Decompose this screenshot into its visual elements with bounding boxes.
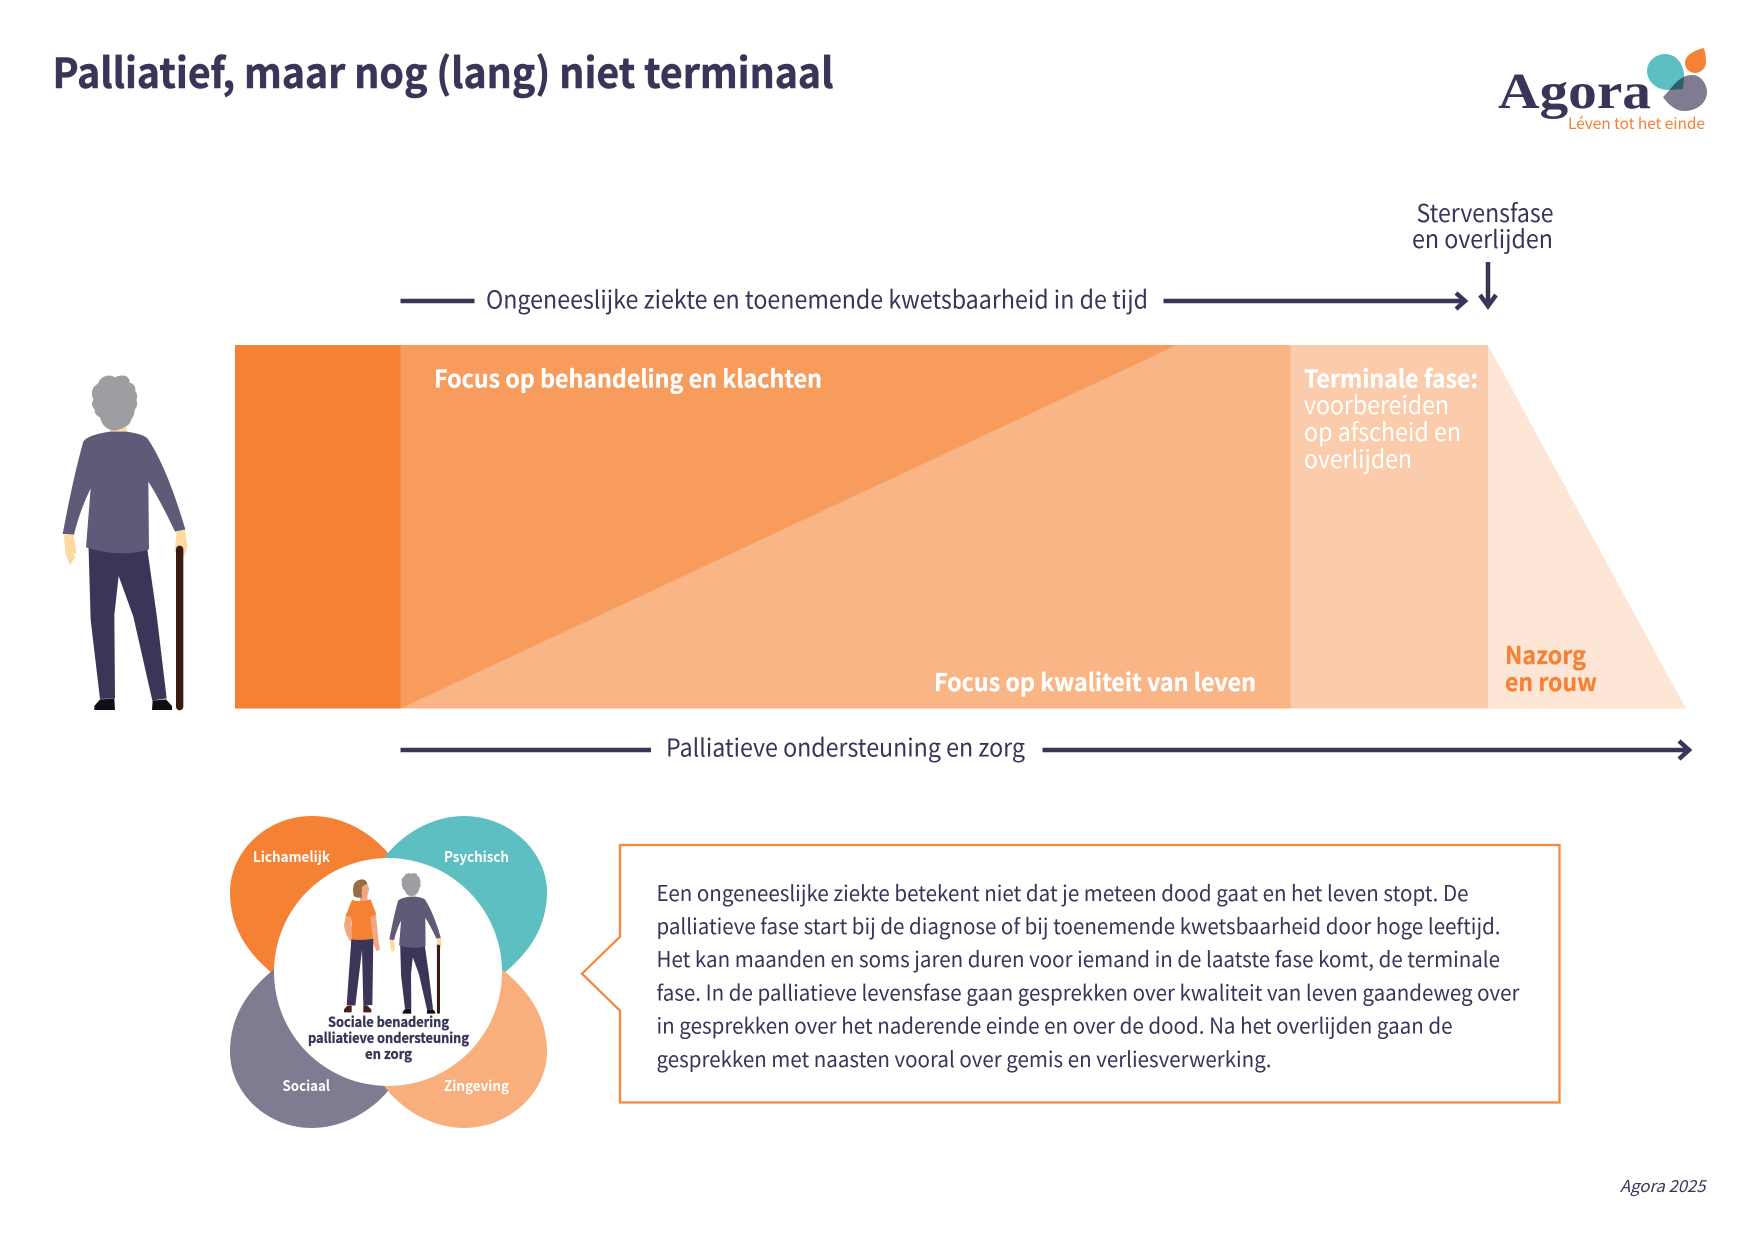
figure: old man with cane <box>63 376 187 710</box>
text: terminal phase: voorbereiden <box>1304 387 1449 422</box>
text: focus on quality: Focus op kwaliteit van leven <box>934 664 1256 699</box>
centre caption <box>308 1012 470 1064</box>
callout: explanation <box>582 845 1560 1102</box>
text: aftercare and grief: en rouw <box>1505 664 1597 699</box>
text: terminal phase: op afscheid en <box>1304 414 1461 449</box>
label: Stervensfase en overlijden: en overlijden <box>1412 221 1553 256</box>
petal: meaning <box>384 970 547 1128</box>
text: terminal phase: overlijden <box>1304 441 1412 476</box>
logo shape: teal drop <box>1647 54 1684 90</box>
callout text: in gesprekken over het naderende einde en over de dood. Na het overlijden gaan de <box>656 1010 1452 1040</box>
phase: treatment triangle <box>400 345 1177 708</box>
logo shape: orange drop <box>1685 48 1706 73</box>
panel: phase diagram band <box>235 345 1686 708</box>
centre caption: Sociale benadering <box>328 1012 450 1032</box>
text: aftercare and grief <box>1505 637 1597 699</box>
text: focus on treatment: Focus op behandeling en klachten <box>434 360 822 396</box>
callout text: fase. In de palliatieve levensfase gaan gesprekken over kwaliteit van leven gaandeweg over <box>656 976 1520 1008</box>
timeline label: Ongeneeslijke ziekte en toenemende kwetsbaarheid in de tijd <box>486 282 1148 316</box>
label: Zingeving: Zingeving <box>444 1075 509 1096</box>
callout text: Het kan maanden en soms jaren duren voor iemand in de laatste fase komt, de terminale <box>656 943 1500 974</box>
timeline arrow <box>1164 293 1465 309</box>
figure: old man small <box>389 873 442 1014</box>
label: Psychisch: Psychisch <box>444 846 509 867</box>
callout border <box>582 845 1560 1102</box>
centre circle <box>274 858 502 1086</box>
phase: terminal <box>1290 345 1488 708</box>
label: Lichamelijk: Lichamelijk <box>253 846 330 867</box>
callout text: palliatieve fase start bij de diagnose of bij toenemende kwetsbaarheid door hoge leeftijd. <box>656 910 1500 941</box>
label: Stervensfase en overlijden <box>1412 195 1554 256</box>
timeline: incurable illness <box>400 282 1465 316</box>
petal: social <box>230 970 392 1128</box>
petal: psychological <box>384 816 547 974</box>
figure: woman <box>344 879 380 1012</box>
logo shape: grey drop <box>1663 75 1707 111</box>
label: Stervensfase en overlijden: Stervensfase <box>1416 195 1554 230</box>
centre caption: palliatieve ondersteuning <box>308 1028 470 1048</box>
phase: diagnosis block <box>235 345 401 708</box>
text: terminal phase: Terminale fase: <box>1304 360 1478 396</box>
callout text: Een ongeneeslijke ziekte betekent niet dat je meteen dood gaat en het leven stopt. De <box>656 877 1468 908</box>
callout text: gesprekken met naasten vooral over gemis en verliesverwerking. <box>656 1043 1272 1074</box>
centre caption: en zorg <box>365 1044 413 1064</box>
logo: Agora <box>1498 48 1707 134</box>
logo wordmark: Agora <box>1498 64 1651 120</box>
petal: physical <box>230 816 392 974</box>
text: aftercare and grief: Nazorg <box>1505 637 1586 672</box>
credit: Agora 2025 <box>1620 1173 1707 1197</box>
arrow: down to death moment <box>1480 262 1496 306</box>
text: terminal phase <box>1304 360 1478 476</box>
timeline label: Palliatieve ondersteuning en zorg <box>666 730 1025 764</box>
timeline arrow <box>1042 741 1689 759</box>
phase: quality of life background <box>400 345 1290 708</box>
phase: aftercare <box>1488 345 1686 708</box>
panel: four dimensions diagram <box>230 816 547 1128</box>
title: Palliatief, maar nog (lang) niet terminaal <box>52 40 834 100</box>
timeline: palliative care <box>400 730 1689 764</box>
logo tagline: Léven tot het einde <box>1568 112 1705 134</box>
callout text <box>656 877 1520 1074</box>
label: Sociaal: Sociaal <box>282 1075 330 1096</box>
